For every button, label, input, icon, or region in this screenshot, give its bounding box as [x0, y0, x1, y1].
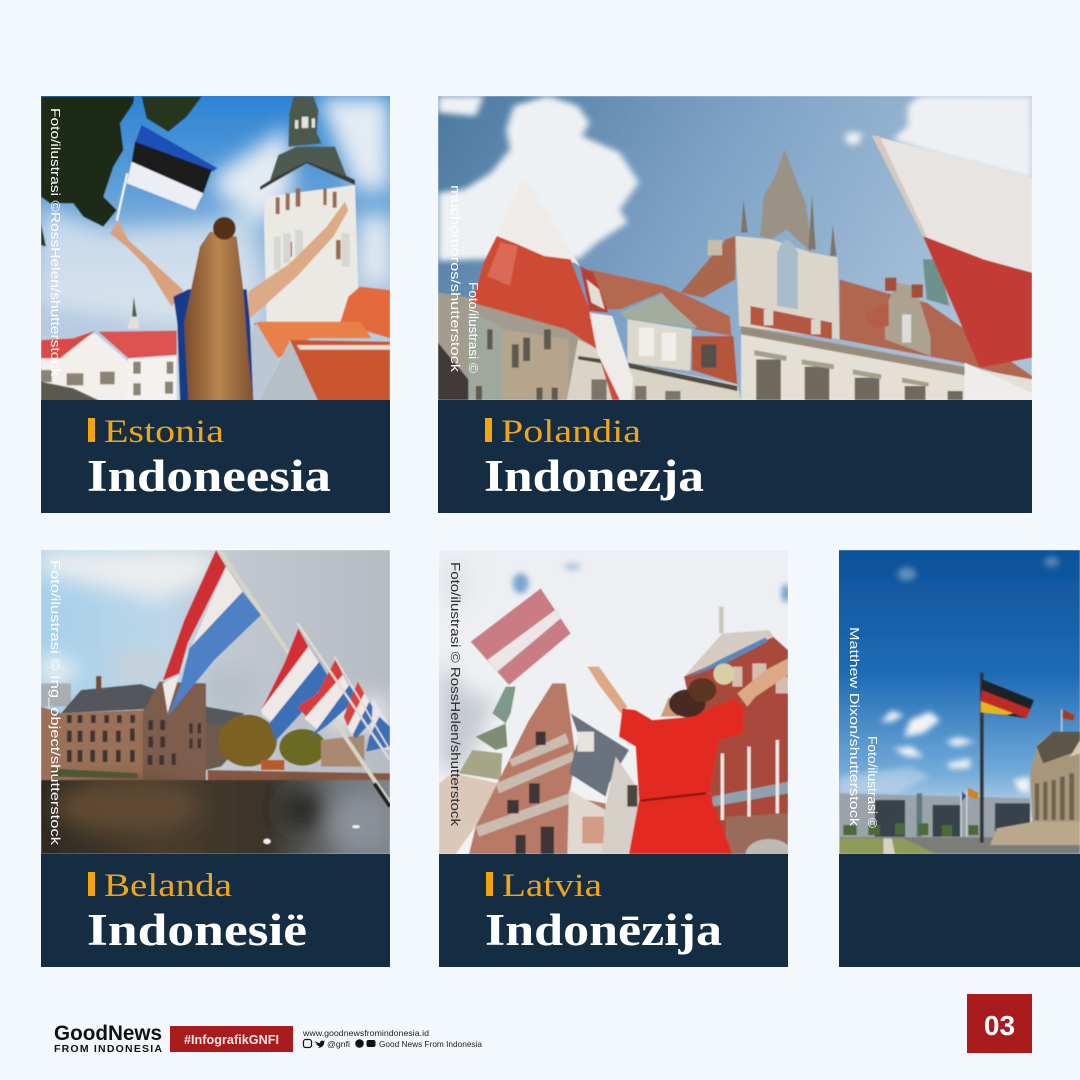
footer: website and social handles: @gnfi [327, 1039, 350, 1049]
photo credit: muchomoros/shutterstock [448, 185, 463, 373]
footer: hashtag badge [170, 1026, 293, 1052]
country label: Latvia [502, 868, 602, 904]
footer: website and social handles: www.goodnewsfromindonesia.id [302, 1028, 429, 1038]
country label: Belanda [104, 868, 232, 904]
photo credit: Foto/ilustrasi © [466, 282, 481, 373]
icon: instagram [304, 1040, 312, 1048]
panel: Belanda [41, 550, 391, 967]
caption bar [438, 400, 1032, 513]
photo credit: Foto/ilustrasi ©RossHelen/shutterstock [48, 108, 63, 377]
page number badge: 03 [984, 1010, 1015, 1041]
photo credit: Foto/ilustrasi © Ing_object/shutterstock [48, 560, 63, 846]
footer: website and social handles [302, 1028, 482, 1049]
accent tick [88, 418, 95, 442]
country label: Estonia [104, 414, 224, 450]
country label: Polandia [501, 414, 641, 450]
panel: Estonia [40, 90, 400, 513]
icon: facebook [355, 1039, 364, 1048]
translated word: Indonēzija [485, 905, 722, 955]
panel: Jerman (cut off at page edge) [830, 550, 1080, 967]
panel: Polandia [438, 96, 1032, 513]
icon: twitter [315, 1040, 325, 1048]
caption bar [439, 854, 788, 967]
translated word: Indonesië [87, 905, 307, 955]
translated word: Indonezja [484, 451, 704, 501]
accent tick [486, 872, 493, 896]
photo credit: Foto/ilustrasi © RossHelen/shutterstock [448, 562, 463, 827]
photo: Polish flags and building [438, 96, 1032, 400]
footer: website and social handles: Good News From Indonesia [379, 1039, 482, 1049]
accent tick [485, 418, 492, 442]
caption bar [839, 854, 1080, 967]
footer: GoodNews logo: GoodNews [54, 1022, 162, 1045]
footer: GoodNews logo [54, 1022, 162, 1055]
page number badge [967, 994, 1032, 1053]
photo credit [847, 627, 880, 828]
photo: Dutch flags over water [41, 550, 391, 854]
icon: youtube [366, 1040, 376, 1047]
footer: GoodNews logo: FROM INDONESIA [54, 1043, 162, 1055]
photo credit [448, 185, 481, 373]
footer: hashtag badge: #InfografikGNFI [184, 1033, 279, 1047]
accent tick [88, 872, 95, 896]
translated word: Indoneesia [87, 451, 331, 501]
caption bar [41, 854, 390, 967]
photo credit: Foto/ilustrasi © [865, 736, 880, 828]
photo: Reichstag with German flag [830, 550, 1080, 860]
caption bar [41, 400, 390, 513]
panel: Latvia [439, 550, 792, 967]
photo: woman in red with Latvian flag [439, 550, 792, 869]
photo credit: Matthew Dixon/shutterstock [847, 627, 862, 827]
photo: woman with Estonian flag [40, 90, 400, 410]
